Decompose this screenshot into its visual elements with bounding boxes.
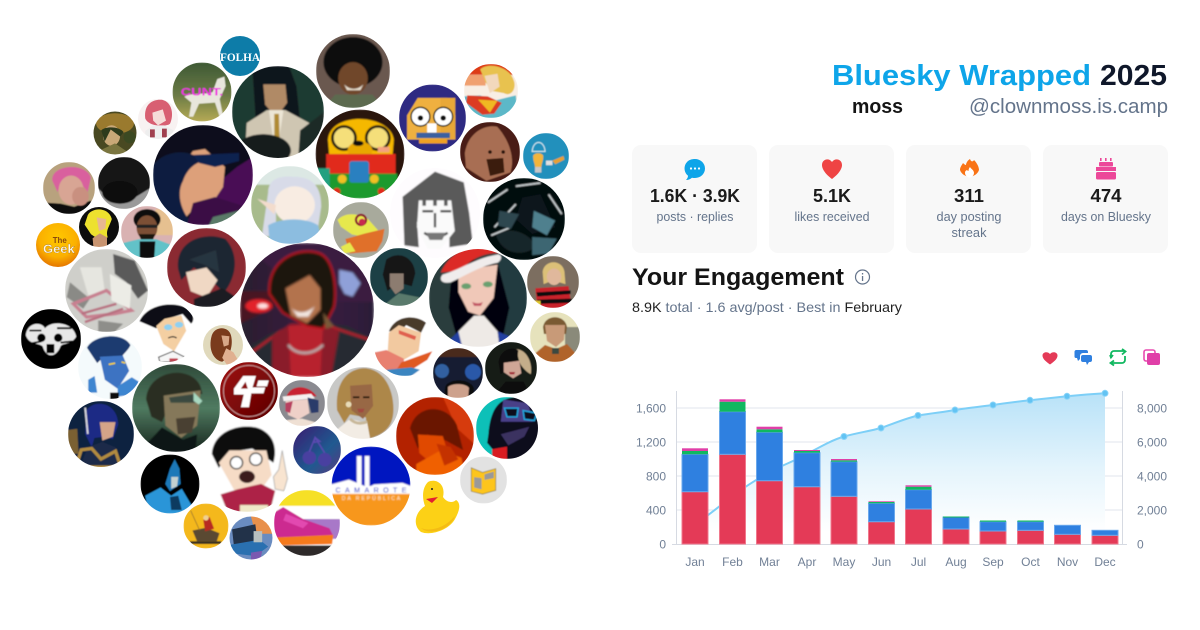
avatar: mob psycho peace sign [210,426,288,512]
stat label: posts · replies [656,210,734,224]
left axis labels: 1,600 [636,402,666,416]
stat value: 1.6K · 3.9K [650,186,740,206]
avatar: white horse [172,62,232,122]
avatar: cherries [293,426,341,474]
avatar: The Geek logo [36,223,80,267]
stat label: day posting [936,210,1002,224]
month labels: Oct [1021,555,1040,569]
avatar: black and white pixel pattern [21,309,81,369]
avatar: nightcrawler [78,335,142,399]
display name: moss [852,96,903,118]
avatar: selfie in crowd [433,348,483,398]
month labels: Feb [722,555,743,569]
avatar: black and white haired woman [485,342,537,394]
avatar: yellow scene [184,504,228,548]
avatar: dark teal comic [483,178,565,260]
avatar: dark haired anime with red background [167,228,246,307]
month labels: Jul [911,555,926,569]
bars: replies [682,412,1118,535]
avatar: blue batman [140,454,200,514]
month labels [685,555,1116,569]
panel: days on Bluesky [1043,145,1168,253]
icon: rubber duck [416,481,459,533]
avatar: curly afro smiling [316,34,390,108]
stat value: 474 [1090,186,1122,206]
icon: replies legend bubbles [1074,350,1092,365]
month labels: Aug [945,555,967,569]
avatar: Camarote da Republica logo [332,446,410,526]
avatar: red toned anime [396,397,474,475]
stat value: 311 [954,186,984,206]
icon: chat bubble [685,159,705,180]
avatar: 4F logo [220,362,278,420]
icon: reposts legend arrows [1110,349,1126,366]
chart: monthly engagement stacked bars with cumulative line [636,390,1167,569]
panel: posts and replies [632,145,757,253]
left axis labels [636,402,666,552]
avatar: white horse: CUNT. [181,87,223,99]
avatar: yellow bunny badge [399,84,466,152]
icon: likes legend heart [1042,352,1058,364]
avatar: folded map badge [460,456,507,504]
month labels: Nov [1057,555,1078,569]
icon: flame [960,159,979,178]
left axis labels: 0 [659,538,666,552]
month labels: Apr [798,555,816,569]
left axis labels: 400 [646,504,666,518]
avatar: blonde comic [79,207,119,247]
avatar: blue haired armored woman [68,401,134,467]
avatar: light bulb cage [523,133,569,179]
bars: reposts [682,402,1044,522]
month labels: Mar [759,555,780,569]
panel: likes received [769,145,894,253]
month labels: Dec [1094,555,1116,569]
avatar: red curly hair woman [203,325,243,365]
avatar: long haired man [232,66,324,158]
avatar: hannibal in green light [132,364,220,452]
avatar: grey manga sketch [65,249,148,332]
stat value: 5.1K [813,186,851,206]
avatar: pink curly hair person [43,162,95,214]
month labels: Jan [685,555,705,569]
avatar: The Geek logo: Geek [43,242,75,256]
icon: info [856,270,870,284]
chart legend [1042,349,1160,366]
right axis labels: 4,000 [1137,470,1167,484]
stat label: days on Bluesky [1061,210,1152,224]
right axis labels: 6,000 [1137,436,1167,450]
avatar: The Geek logo: The [53,236,67,245]
avatar: yellow creature with headphones [333,202,389,258]
avatar: frieren elf [251,166,329,244]
right axis labels: 2,000 [1137,504,1167,518]
month labels: May [833,555,855,569]
chart axes [672,391,1127,544]
avatar: alice with santa hat [429,249,527,347]
month labels: Sep [982,555,1004,569]
icon: cake [1096,158,1116,180]
avatar: grey ink portrait [402,170,473,248]
avatar: girl with santa hat [279,380,325,426]
handle: @clownmoss.is.camp [969,96,1168,118]
panel: day posting streak [906,145,1031,253]
panel: avatar bubble cluster [21,34,580,560]
avatar: pink haired anime [138,99,178,139]
left axis labels: 1,200 [636,436,666,450]
avatar: man with glasses [121,206,173,258]
right axis labels: 0 [1137,538,1144,552]
avatar: man in orange jacket [530,312,580,362]
avatar: transformers comic [230,516,272,560]
avatar: clay face [460,122,520,182]
heading: your engagement: Your Engagement [632,264,844,291]
engagement summary: 8.9K total · 1.6 avg/post · Best in February [632,299,902,315]
avatar: Jake the dog [316,110,404,198]
avatar: red hooded character, largest [240,243,374,377]
avatar: black dog [98,157,150,209]
left axis labels: 800 [646,470,666,484]
title: Bluesky Wrapped [832,60,1091,92]
avatar: vader with sunglasses [476,397,538,459]
avatar: supergirl [464,64,518,118]
avatar: Camarote da Republica logo: CAMAROTE [335,487,407,495]
icon: quotes legend squares [1144,350,1160,365]
right axis labels [1137,402,1167,552]
avatar: danny phantom [139,304,194,362]
avatar: dark haired girl teal [370,248,428,306]
avatar: impressionist painting [94,112,136,154]
avatar: pink loafer [274,490,340,556]
avatar: sleeping blue haired profile [153,125,253,225]
cumulative line [695,393,1105,525]
line points [804,390,1108,457]
right axis labels: 8,000 [1137,402,1167,416]
title: 2025 [1100,60,1167,92]
avatar: blonde in flamengo shirt [527,256,579,308]
stat label second line: streak [952,226,987,240]
stat label: likes received [794,210,870,224]
avatar: superman [374,316,432,376]
cumulative area [695,393,1105,544]
grid lines [676,408,1123,510]
bars: quotes [682,399,932,502]
avatar: glamour portrait [327,367,399,439]
avatar: Folha logo [220,36,260,76]
month labels: Jun [872,555,891,569]
bars: likes [682,454,1118,544]
avatar: Camarote da Republica logo: DA REPÚBLICA [342,495,401,502]
icon: heart [822,159,842,179]
